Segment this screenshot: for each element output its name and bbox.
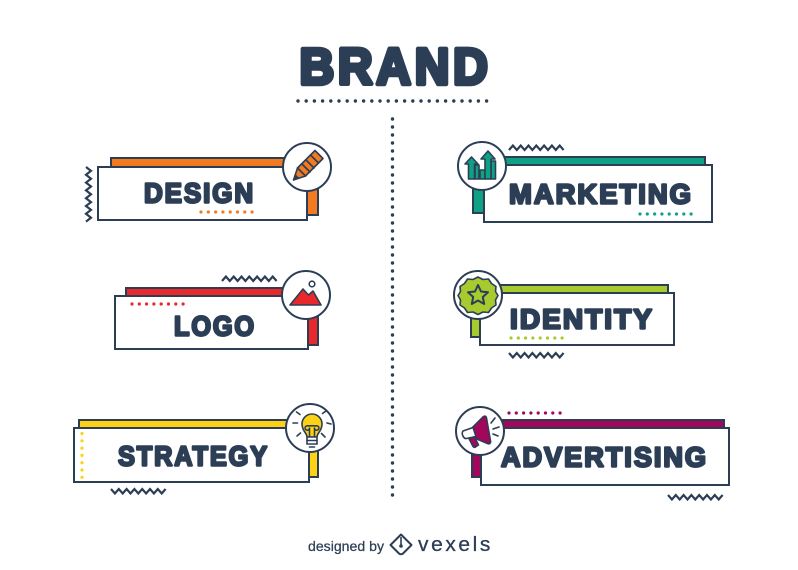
zigzag: marketing	[509, 146, 564, 150]
dots: identity	[511, 336, 563, 340]
panel: strategy	[74, 404, 334, 494]
icon: star badge	[454, 271, 502, 319]
dots: logo	[132, 302, 184, 306]
zigzag: advertising	[668, 495, 723, 500]
icon: pencil	[283, 143, 331, 191]
icon: vexels logo	[390, 534, 412, 554]
zigzag: design	[86, 167, 91, 222]
dots: advertising	[509, 411, 561, 415]
panel: marketing	[458, 142, 712, 222]
panel: identity	[454, 271, 674, 358]
icon: megaphone	[456, 407, 504, 455]
panel: design	[86, 143, 331, 222]
heading: marketing: MARKETING	[509, 178, 693, 210]
center divider	[391, 119, 394, 501]
footer: designed by vexels: vexels	[418, 534, 493, 556]
icon: growth chart	[458, 142, 506, 190]
title: BRAND	[300, 38, 492, 95]
footer: designed by vexels: designed by	[308, 539, 384, 554]
heading: advertising: ADVERTISING	[501, 442, 708, 472]
heading: identity: IDENTITY	[510, 304, 654, 334]
zigzag: strategy	[111, 489, 166, 494]
panel: logo	[115, 271, 330, 349]
icon: light bulb	[286, 404, 334, 452]
heading: strategy: STRATEGY	[118, 440, 269, 472]
dots: design	[201, 210, 254, 214]
dots: marketing	[640, 212, 692, 216]
heading: logo: LOGO	[174, 310, 256, 342]
zigzag: logo	[222, 276, 277, 281]
panel: advertising	[456, 407, 729, 500]
dots: strategy	[80, 434, 84, 478]
icon: mountain picture	[282, 271, 330, 319]
heading: design: DESIGN	[144, 178, 255, 208]
zigzag: identity	[509, 353, 564, 358]
footer: designed by vexels	[308, 534, 493, 556]
